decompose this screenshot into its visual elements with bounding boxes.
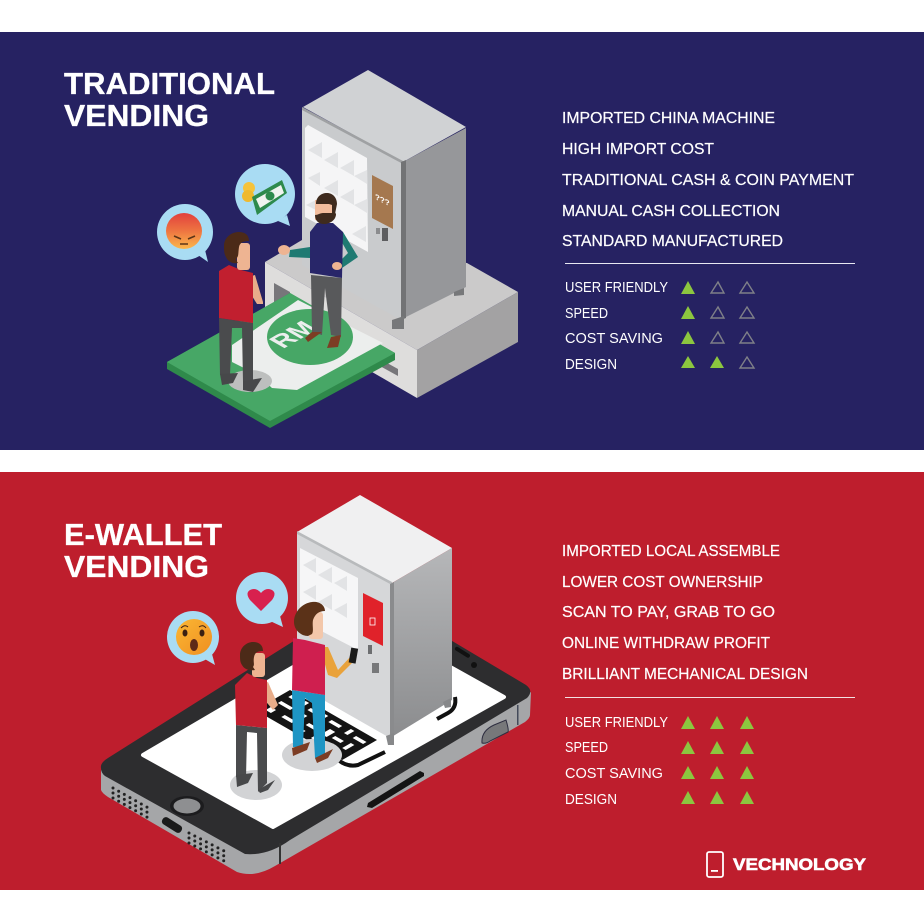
price panel: ??? (375, 191, 390, 208)
feature list: e-wallet: LOWER COST OWNERSHIP (562, 574, 763, 591)
feature list: traditional: HIGH IMPORT COST (562, 141, 714, 158)
rating table: traditional: COST SAVING (565, 330, 663, 347)
panel: e-wallet vending (0, 472, 924, 890)
rating table: e-wallet (565, 714, 754, 808)
figure: man in red shirt (219, 232, 263, 392)
heading: e-wallet vending: E-WALLET (64, 517, 222, 552)
illustration: banknote (167, 293, 395, 428)
rating table: e-wallet: COST SAVING (565, 765, 663, 782)
home button (170, 796, 204, 816)
illustration: smartphone (101, 596, 531, 874)
feature list: traditional: STANDARD MANUFACTURED (562, 233, 783, 250)
figure: bearded man (278, 193, 358, 348)
icon: cash bubble (235, 164, 295, 226)
rating table: e-wallet: DESIGN (565, 791, 617, 808)
feature list: e-wallet: ONLINE WITHDRAW PROFIT (562, 635, 770, 652)
feature list: traditional: IMPORTED CHINA MACHINE (562, 110, 775, 127)
heading: traditional vending (64, 66, 275, 133)
feature list: traditional: TRADITIONAL CASH & COIN PAYMENT (562, 172, 854, 189)
illustration: banknote: RM (262, 317, 323, 352)
heading: e-wallet vending: VENDING (64, 549, 209, 584)
feature list: e-wallet (562, 543, 808, 683)
rating table: e-wallet: SPEED (565, 739, 608, 756)
icon: surprised emoji bubble (167, 611, 219, 665)
e-wallet panel (363, 593, 383, 646)
logo: vechnology (707, 852, 867, 877)
rating table: traditional: USER FRIENDLY (565, 279, 668, 296)
heading: e-wallet vending (64, 517, 222, 584)
rating table: traditional (565, 279, 754, 373)
illustration: concrete base (265, 240, 518, 398)
rating table: e-wallet: USER FRIENDLY (565, 714, 668, 731)
heading: traditional vending: TRADITIONAL (64, 66, 275, 101)
illustration: QR code (255, 690, 455, 766)
figure: man in blue jeans (282, 602, 358, 771)
panel: traditional vending (0, 32, 924, 450)
illustration: e-wallet vending machine (297, 495, 452, 745)
rating table: traditional: SPEED (565, 305, 608, 322)
rating table: traditional: DESIGN (565, 356, 617, 373)
figure: man in red shirt (230, 642, 282, 800)
feature list: traditional (562, 110, 854, 250)
feature list: e-wallet: BRILLIANT MECHANICAL DESIGN (562, 666, 808, 683)
icon: angry emoji bubble (157, 204, 213, 262)
feature list: traditional: MANUAL CASH COLLECTION (562, 203, 780, 220)
price panel (372, 175, 393, 229)
heading: traditional vending: VENDING (64, 98, 209, 133)
icon: heart bubble (236, 572, 288, 627)
feature list: e-wallet: IMPORTED LOCAL ASSEMBLE (562, 543, 780, 560)
feature list: e-wallet: SCAN TO PAY, GRAB TO GO (562, 604, 775, 621)
illustration: traditional vending machine (302, 70, 466, 329)
logo: vechnology: VECHNOLOGY (733, 855, 867, 874)
